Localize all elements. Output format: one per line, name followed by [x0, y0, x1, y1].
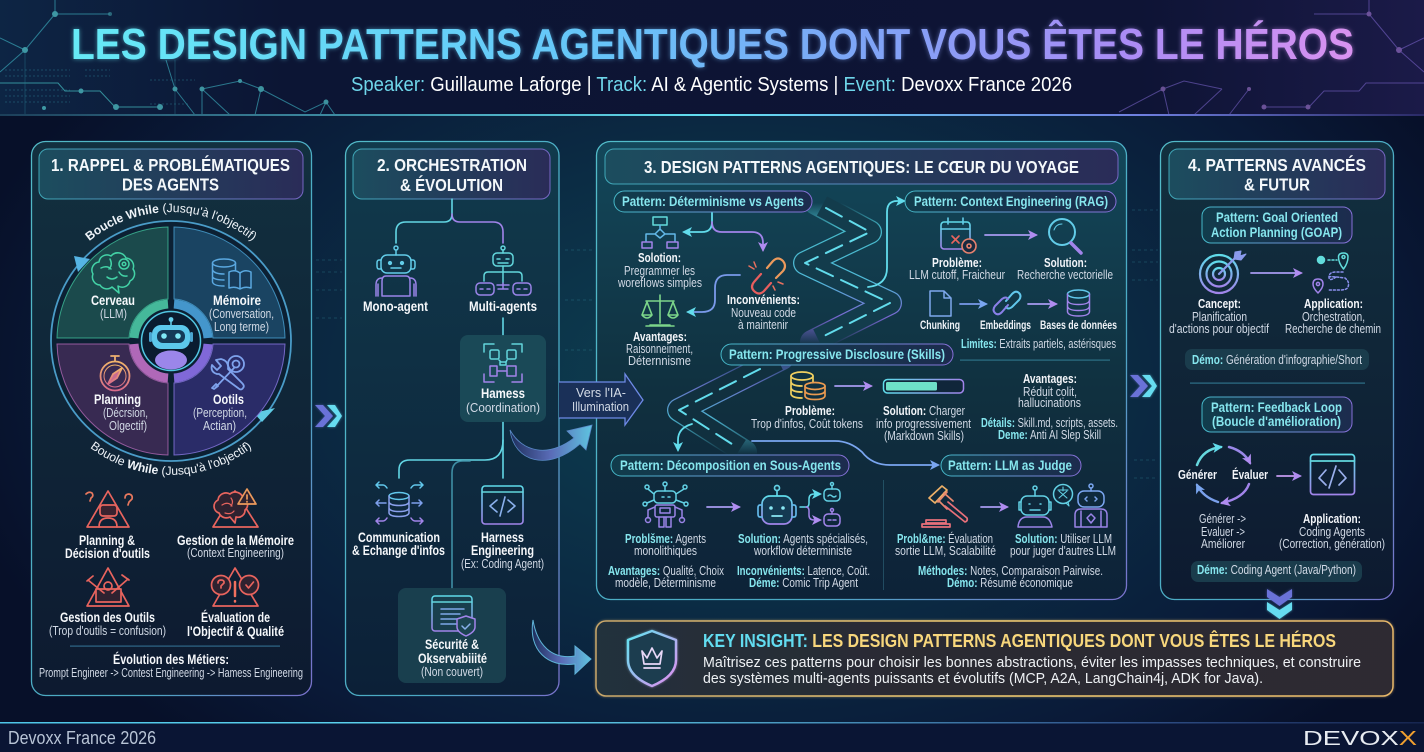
loop ring with arrows — [51, 221, 291, 461]
icon: two robots with speech bubble — [1018, 484, 1107, 527]
heading: panel 1: DES AGENTS — [122, 174, 219, 194]
icon: database with arrows — [376, 482, 423, 524]
problem: gestion de la mémoire — [177, 489, 294, 560]
icon: document — [930, 291, 951, 316]
problem: planning et décision — [65, 491, 150, 561]
problem: évaluation de l'objectif: Évaluation de — [201, 610, 270, 625]
pattern: progressive disclosure — [721, 344, 1118, 443]
heading: panel 3 — [605, 149, 1118, 184]
pill label — [905, 191, 1116, 212]
footer divider line — [0, 722, 1424, 724]
curved label: bottom loop: Bouole While (Jusqu'à l'objectif) — [90, 441, 252, 478]
item: communication et échange: & Echange d'infos — [352, 543, 445, 558]
pattern: progressive disclosure: info progressivement — [876, 417, 971, 431]
pattern: déterminisme vs agents — [614, 191, 812, 368]
arrow: swoosh to key insight — [532, 620, 591, 674]
pattern: décomposition en sous-agents: Avantages: Qualité, Choix — [608, 564, 725, 578]
pill label — [721, 344, 953, 365]
curved label: top loop: Boucle While (Jusqu'à l'objectif) — [84, 203, 256, 242]
card: harness coordination: (Coordination) — [466, 401, 540, 415]
pattern: llm as judge — [895, 455, 1116, 590]
demo chip: génération d'infographie — [1185, 349, 1369, 370]
agent loop diagram — [50, 203, 292, 478]
pattern: feedback loop: Améliorer — [1201, 537, 1245, 551]
icon: broken chain — [749, 258, 785, 294]
item: mono-agent: Mono-agent — [363, 299, 428, 314]
icon: route map — [1313, 253, 1349, 293]
icon: mono-agent robot — [376, 246, 416, 296]
pattern: context engineering rag: Solution: — [1044, 256, 1087, 270]
pill label: Pattern: Déterminisme vs Agents — [622, 193, 804, 209]
pattern: progressive disclosure: Problème: — [785, 404, 835, 418]
header network decoration — [0, 0, 335, 115]
item: harness engineering: Harness — [481, 530, 524, 545]
icon: database and book — [212, 259, 251, 289]
pattern: décomposition en sous-agents: Problšme: Agents — [625, 532, 706, 546]
pattern: progressive disclosure: Détails: Skill.md, scripts, assets. — [981, 416, 1118, 430]
icon: target with arrow — [1200, 251, 1246, 293]
problem: évaluation de l'objectif — [187, 568, 284, 639]
arrow: problem to solution — [981, 506, 1007, 508]
problem: gestion de la mémoire: Gestion de la Mémoire — [177, 533, 294, 548]
pattern: progressive disclosure: hallucinations — [1018, 396, 1081, 410]
icon: multi-agent hierarchy — [476, 246, 531, 295]
arrow: panel 4 to key insight — [1267, 589, 1292, 619]
arrow callout: vers l'IA-llumination: Illumination — [572, 400, 629, 414]
pattern: progressive disclosure: Solution: Charger — [883, 404, 965, 418]
card: sécurité et observabilité: Okservabiiité — [418, 651, 487, 666]
road: zigzag journey lower — [679, 358, 782, 452]
pill label — [1202, 397, 1352, 432]
icon: monolithic robot — [643, 482, 688, 527]
arrow: problem to solution — [985, 234, 1036, 236]
problem: gestion des outils: (Trop d'outils = confusion) — [49, 624, 166, 638]
icon: brace to sub-agents — [800, 482, 840, 526]
arrow: problem to progress bar — [835, 385, 871, 387]
pattern: déterminisme vs agents: Avantages: — [633, 330, 687, 344]
callout: key insight: des systèmes multi-agents puissants et évolutifs (MCP, A2A, LangChain4j, ADK for Java). — [703, 670, 1263, 687]
header divider line — [0, 114, 1424, 116]
pattern: déterminisme vs agents: Raisonneiment, — [626, 342, 693, 356]
item: mono-agent — [363, 246, 428, 314]
pattern: feedback loop: (Correction, génération) — [1279, 537, 1385, 551]
heading: panel 2: 2. ORCHESTRATION — [377, 155, 527, 175]
pattern: llm as judge: Probl&me: Évaluation — [897, 531, 993, 546]
pill label — [611, 455, 849, 476]
pattern: context engineering rag: LLM cutoff, Fraicheur — [909, 268, 1005, 282]
pattern: goal oriented action planning: d'actions pour objectif — [1169, 322, 1269, 336]
icon: compass — [100, 356, 130, 390]
pill label: Pattern: Goal Oriented — [1216, 209, 1338, 225]
pattern: context engineering rag: Bases de données — [1040, 318, 1117, 332]
pattern: déterminisme vs agents: Inconvénients: — [727, 293, 800, 307]
quadrant: mémoire: Mémoire — [213, 293, 261, 308]
callout: key insight: Maîtrisez ces patterns pour choisir les bonnes abstractions, éviter les impasses techniques, et construire — [703, 654, 1361, 671]
callout: key insight — [596, 621, 1393, 696]
card: sécurité et observabilité: (Non couvert) — [421, 665, 483, 679]
pattern: déterminisme vs agents: worefIows simples — [617, 276, 702, 290]
pattern: décomposition en sous-agents — [608, 455, 870, 590]
logo: devoxx: DEVOX X — [1303, 728, 1417, 750]
pattern: déterminisme vs agents: Nouveau code — [731, 306, 796, 320]
pill label — [1202, 207, 1352, 243]
arrow: embeddings to database — [1028, 303, 1056, 305]
icon: wrench and screwdriver — [212, 356, 244, 390]
pill label: Pattern: Feedback Loop — [1211, 399, 1342, 415]
item: communication et échange: Communication — [358, 530, 440, 545]
icon: code window — [482, 486, 523, 524]
pattern: goal oriented action planning: Cancept: — [1198, 297, 1241, 311]
quadrant: outils: Actian) — [203, 419, 236, 433]
pill label — [614, 191, 812, 212]
icon: stacked coins — [791, 372, 825, 400]
icon: flowchart — [642, 217, 678, 248]
heading: panel 1 — [39, 149, 303, 199]
quadrant: cerveau: (LLM) — [100, 307, 127, 321]
pattern: déterminisme vs agents: Pregrammer les — [624, 264, 695, 278]
icon: scales — [642, 295, 678, 326]
problem: gestion des outils — [49, 568, 166, 638]
panel: 4 patterns avancés et futur — [1160, 142, 1394, 600]
problem: gestion des outils: Gestion des Outils — [60, 610, 155, 625]
card: harness coordination: Hamess — [481, 386, 525, 401]
quadrant: planning — [57, 344, 168, 455]
pattern: context engineering rag: Embeddings — [980, 318, 1031, 332]
arrow: monolith to specialised agents — [707, 506, 739, 508]
icon: cycle arrows — [1197, 447, 1250, 503]
pattern: progressive disclosure: (Markdown Skills) — [884, 429, 964, 443]
pattern: feedback loop: Evaluer -> — [1201, 525, 1245, 539]
pattern: progressive disclosure: Réduit colit, — [1023, 385, 1077, 399]
pattern: progressive disclosure: Avantages: — [1023, 372, 1077, 386]
icon: question and check with warning — [212, 568, 258, 606]
icon: brain with gear — [92, 253, 135, 293]
icon: document with shield — [432, 596, 475, 636]
pill label: Pattern: Progressive Disclosure (Skills) — [729, 346, 945, 362]
problem: gestion de la mémoire: (Context Engineering) — [187, 546, 284, 560]
icon: central robot — [142, 312, 200, 370]
arrow callout: vers l'IA-llumination: Vers l'IA- — [576, 386, 626, 400]
panel: 2 orchestration et évolution — [346, 142, 559, 696]
pattern: feedback loop: Coding Agents — [1299, 525, 1365, 539]
pill label — [941, 455, 1081, 476]
pill label: Pattern: Context Engineering (RAG) — [914, 193, 1108, 209]
icon: magnifier — [1049, 219, 1081, 253]
pattern: context engineering rag — [905, 191, 1117, 351]
arrow: concept to application — [1251, 272, 1301, 274]
pattern: llm as judge: sortie LLM, Scalabilité — [895, 544, 996, 558]
icon: gavel — [922, 486, 967, 527]
arrow: chunking to embeddings — [960, 303, 986, 305]
text block: évolution des métiers — [39, 652, 303, 680]
arrow: road to décomposition — [678, 424, 692, 450]
pill label: Pattern: LLM as Judge — [948, 457, 1072, 473]
quadrant: outils: (Perception, — [193, 406, 247, 420]
arrow: panel 3 to panel 4 — [1130, 375, 1157, 397]
item: harness engineering: Engineering — [471, 543, 534, 558]
road: zigzag journey upper — [805, 203, 890, 342]
icon: shield with crown — [628, 631, 676, 686]
pattern: déterminisme vs agents: Solotion: — [638, 251, 681, 265]
card: harness coordination — [460, 335, 546, 422]
problem: planning et décision: Planning & — [79, 533, 135, 548]
item: harness engineering: (Ex: Coding Agent) — [461, 557, 544, 571]
quadrant: outils — [174, 344, 285, 455]
quadrant: planning: Olgectif) — [109, 419, 147, 433]
quadrant: outils: Ootils — [213, 392, 244, 407]
quadrant: cerveau — [57, 227, 168, 338]
icon: brain with warning — [213, 489, 258, 527]
quadrant: mémoire: (Conversation, — [209, 307, 274, 321]
icon: progress bar — [884, 380, 964, 393]
arrow: panel 1 to panel 2 — [315, 405, 342, 427]
pattern: feedback loop: Application: — [1303, 512, 1361, 526]
heading: panel 2: & ÉVOLUTION — [400, 174, 503, 195]
quadrant: cerveau: Cerveau — [91, 293, 135, 308]
pattern: progressive disclosure: Deme: Anti AI Slep Skill — [998, 428, 1101, 442]
arrow: road to llm as judge — [752, 441, 938, 465]
heading: panel 4: & FUTUR — [1244, 174, 1310, 194]
panel: 3 design patterns agentiques — [596, 142, 1126, 600]
pattern: llm as judge: Solution: Utiliser LLM — [1015, 532, 1112, 546]
pattern: context engineering rag: Recherche vectorielle — [1017, 268, 1113, 282]
item: multi-agents: Multi-agents — [469, 299, 537, 314]
item: harness engineering — [461, 486, 544, 571]
icon: specialised agents robot — [758, 486, 796, 524]
heading: panel 1: 1. RAPPEL & PROBLÉMATIQUES — [51, 154, 290, 175]
icon: toolbox in triangle — [87, 568, 129, 606]
pattern: décomposition en sous-agents: Inconvénients: Latence, Coût. — [737, 564, 870, 578]
text block: évolution des métiers: Prompt Engineer -> Contest Engineering -> Hamess Engineering — [39, 666, 303, 680]
heading: panel 4 — [1169, 149, 1385, 199]
pattern: llm as judge: pour juger d'autres LLM — [1010, 544, 1116, 558]
icon: link — [994, 292, 1020, 314]
pattern: feedback loop: Générer — [1178, 468, 1217, 482]
heading: panel 4: 4. PATTERNS AVANCÉS — [1188, 154, 1366, 175]
item: multi-agents — [469, 246, 537, 314]
pattern: décomposition en sous-agents: workflow déterministe — [753, 544, 852, 558]
pattern: goal oriented action planning: Orchestration, — [1302, 310, 1365, 324]
quadrant: planning: (Décrsion, — [103, 406, 148, 420]
arrow callout: vers l'IA-llumination — [559, 374, 643, 425]
pattern: déterminisme vs agents: Déternnisme — [628, 354, 691, 368]
subtitle: speaker, track, event: Speaker: Guillaume Laforge | Track: AI & Agentic Systems | Event: Devoxx France 2026 — [351, 74, 1072, 96]
pattern: goal oriented action planning: Recherche de chemin — [1285, 322, 1381, 336]
heading: panel 2 — [353, 149, 550, 199]
arrow: swoosh to design patterns — [510, 425, 592, 460]
heading: panel 3: 3. DESIGN PATTERNS AGENTIQUES: LE CŒUR DU VOYAGE — [644, 157, 1079, 177]
quadrant: planning: Planning — [94, 392, 141, 407]
pill label: (Boucle d'amélioration) — [1212, 413, 1341, 429]
text block: évolution des métiers: Évolution des Métiers: — [113, 652, 229, 667]
quadrant: mémoire: Long terme) — [214, 320, 269, 334]
panel: 1 rappel et problématiques — [30, 140, 312, 696]
card: sécurité et observabilité: Sécurité & — [425, 637, 479, 652]
pattern: feedback loop: Générer -> — [1199, 512, 1246, 526]
arrow: road to context engineering — [868, 201, 904, 287]
pattern: feedback loop — [1178, 397, 1385, 582]
pattern: feedback loop: Évaluer — [1232, 467, 1268, 482]
problem: évaluation de l'objectif: l'Objectif & Qualité — [187, 624, 284, 639]
pill label: Action Planning (GOAP) — [1211, 224, 1342, 240]
footer label: Devoxx France 2026 — [8, 728, 156, 748]
pattern: décomposition en sous-agents: modèle, Déterminisme — [615, 576, 716, 590]
callout: key insight: KEY INSIGHT: LES DESIGN PATTERNS AGENTIQUES DONT VOUS ÊTES LE HÉROS — [703, 630, 1336, 651]
item: communication et échange — [352, 482, 445, 558]
icon: robot in warning triangle — [86, 491, 132, 527]
pattern: déterminisme vs agents: à maintenir — [738, 318, 788, 332]
pattern: progressive disclosure: Trop d'infos, Coût tokens — [751, 417, 863, 431]
demo chip: coding agent: Déme: Coding Agent (Java/Python) — [1197, 563, 1356, 577]
arrow: loop to application — [1277, 475, 1300, 477]
quadrant: mémoire — [174, 227, 285, 338]
pattern: context engineering rag: Chunking — [920, 318, 960, 332]
pattern: décomposition en sous-agents: Solution: Agents spécialisés, — [738, 532, 868, 546]
demo chip: génération d'infographie: Démo: Génération d'infographie/Short — [1192, 353, 1362, 367]
pattern: goal oriented action planning: Application: — [1304, 297, 1363, 311]
icon: code window — [1310, 454, 1354, 494]
pattern: context engineering rag: Limites: Extraits partiels, astérisques — [961, 337, 1116, 351]
demo chip: coding agent — [1191, 561, 1362, 582]
branching arrows — [684, 213, 763, 312]
pattern: llm as judge: Méthodes: Notes, Comparaison Pairwise. — [918, 564, 1103, 578]
icon: calendar with cutoff — [941, 218, 976, 253]
pill label: Pattern: Décomposition en Sous-Agents — [620, 457, 841, 473]
connector tree — [396, 199, 503, 588]
pattern: llm as judge: Démo: Résumé économique — [947, 576, 1073, 590]
icon: harness frame — [484, 344, 522, 382]
pattern: décomposition en sous-agents: monolithiques — [634, 544, 697, 558]
pattern: goal oriented action planning — [1169, 207, 1381, 370]
pattern: context engineering rag: Problème: — [932, 256, 982, 270]
pattern: goal oriented action planning: Planification — [1192, 310, 1247, 324]
problem: planning et décision: Décision d'outils — [65, 546, 150, 561]
card: sécurité et observabilité — [398, 588, 506, 683]
icon: database — [1068, 290, 1090, 316]
pattern: décomposition en sous-agents: Déme: Comic Trip Agent — [749, 576, 858, 590]
